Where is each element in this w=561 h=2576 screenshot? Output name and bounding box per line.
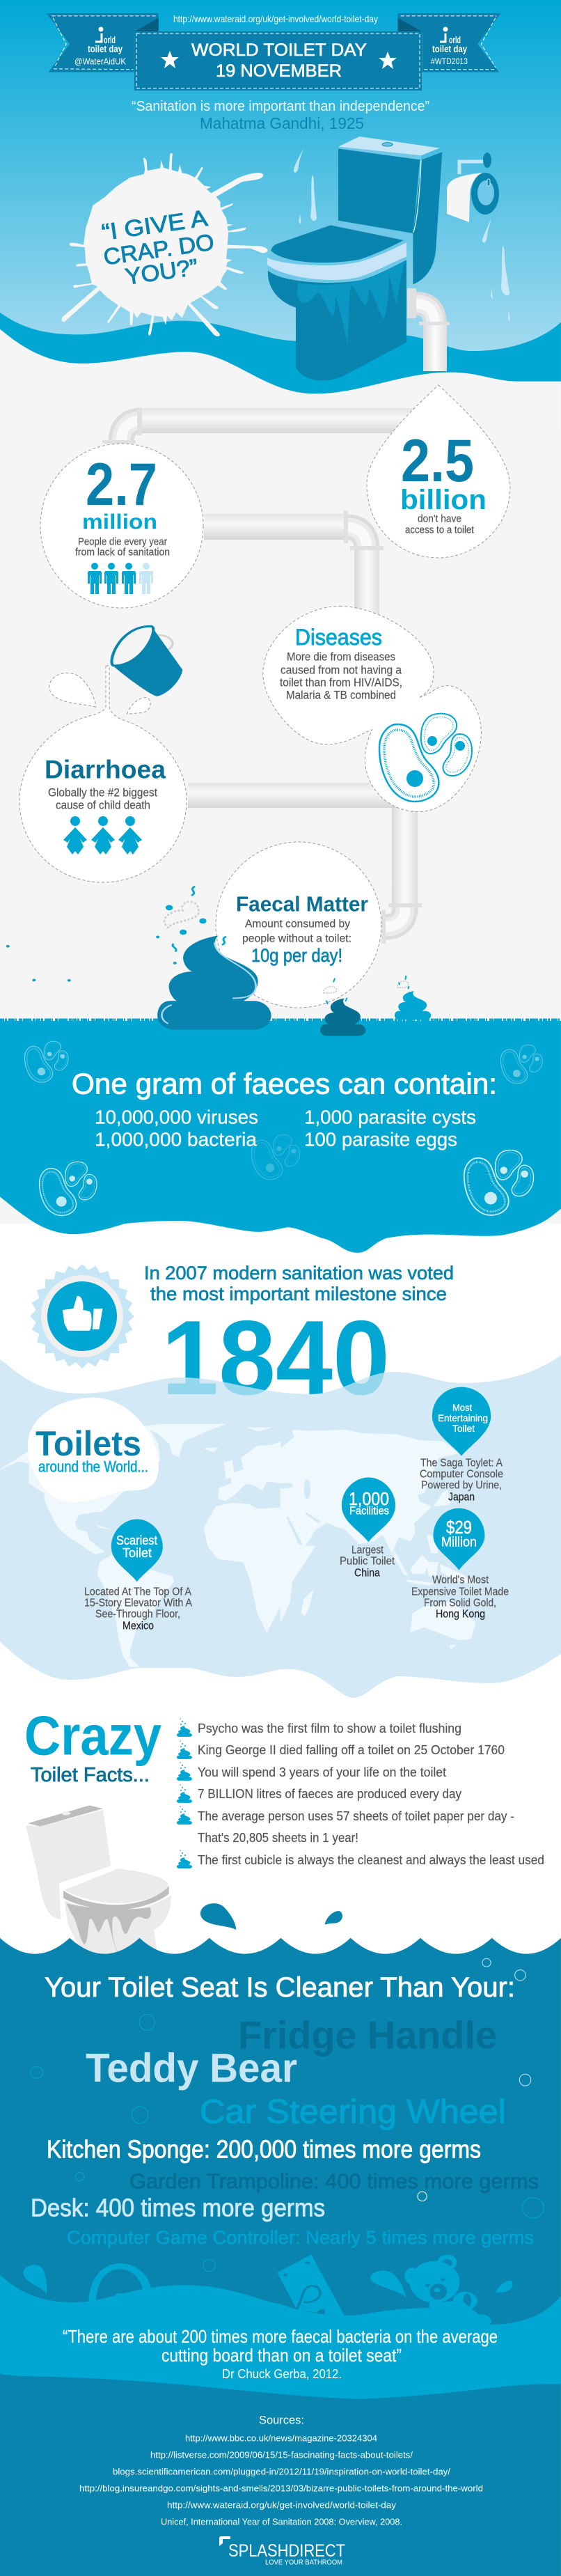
heading: milestone — [144, 1263, 454, 1304]
list: crazy facts: 7 BILLION litres of faeces are produced every day — [198, 1787, 461, 1801]
banner: title: 19 NOVEMBER — [216, 61, 342, 81]
bubble: 2.7 million: 2.7 — [86, 451, 157, 518]
text: saga toylet japan: The Saga Toylet: A — [420, 1457, 503, 1469]
quote attribution: Mahatma Gandhi, 1925 — [200, 114, 364, 132]
sources: blogs.scientificamerican.com/plugged-in/2012/11/19/inspiration-on-world-toilet-day/ — [113, 2467, 450, 2476]
pin: most entertaining toilet: Toilet — [452, 1423, 475, 1434]
banner: right ribbon tail: #WTD2013 — [431, 56, 468, 66]
panel: one gram of faeces: 100 parasite eggs — [304, 1128, 457, 1150]
panel: one gram of faeces: 10,000,000 viruses — [95, 1106, 258, 1128]
heading: toilets around the world: around the World... — [38, 1458, 148, 1475]
banner: left ribbon tail: orld — [104, 34, 116, 45]
bubble: diseases and parasite: Malaria & TB combined — [286, 688, 396, 702]
text: scariest toilet mexico: Mexico — [123, 1620, 154, 1632]
bubble: faecal matter: people without a toilet: — [242, 933, 351, 944]
icon: thumbs up badge — [30, 1264, 134, 1368]
panel: one gram of faeces: 1,000,000 bacteria — [95, 1128, 257, 1150]
list: crazy facts: Psycho was the first film to show a toilet flushing — [198, 1722, 461, 1735]
sources — [79, 2414, 483, 2527]
pin: $29 million — [433, 1508, 484, 1570]
drop large — [200, 1903, 236, 1930]
bubble: diseases and parasite: toilet than from HIV/AIDS, — [280, 676, 402, 689]
text: saga toylet japan: Powered by Urine, — [421, 1479, 502, 1492]
text: most expensive toilet hong kong: Expensive Toilet Made — [411, 1586, 509, 1598]
year 1840: 1840 — [161, 1299, 390, 1417]
panel: dark lower section — [0, 1938, 561, 2576]
banner: left ribbon tail — [47, 13, 159, 72]
item: kitchen sponge: Kitchen Sponge: 200,000 times more germs — [47, 2135, 481, 2163]
pin: scariest toilet: Toilet — [123, 1546, 152, 1560]
logo: splashdirect: SPLASHDIRECT — [228, 2541, 345, 2561]
sources: Unicef, International Year of Sanitation 2008: Overview, 2008. — [161, 2517, 402, 2527]
bubble: diarrhoea — [19, 666, 187, 882]
item: teddy bear: Teddy Bear — [86, 2046, 297, 2091]
splat with slogan — [62, 153, 267, 336]
bubble: 2.5 billion: 2.5 — [401, 428, 474, 494]
banner: title — [134, 31, 422, 91]
pin: $29 million: $29 — [446, 1517, 472, 1538]
panel: one gram of faeces: One gram of faeces can contain: — [72, 1067, 497, 1100]
banner: right ribbon tail: toilet day — [432, 43, 467, 54]
heading: crazy toilet facts: Toilet Facts... — [31, 1764, 150, 1786]
list: crazy facts: The average person uses 57 sheets of toilet paper per day - — [198, 1809, 514, 1823]
text: scariest toilet mexico: 15-Story Elevator With A — [84, 1598, 192, 1609]
bubble: diseases and parasite: caused from not having a — [280, 663, 402, 677]
toilet — [267, 136, 442, 380]
waves under header — [0, 313, 561, 432]
background: sky — [0, 0, 561, 433]
bubble: 2.7 million: million — [82, 510, 157, 533]
list: crazy facts: King George II died falling off a toilet on 25 October 1760 — [198, 1743, 505, 1757]
text: scariest toilet mexico: Located At The Top Of A — [84, 1586, 191, 1598]
bubble: diarrhoea: Globally the #2 biggest — [48, 786, 157, 799]
sources: http://listverse.com/2009/06/15/15-fascinating-facts-about-toilets/ — [150, 2450, 413, 2460]
heading: toilets around the world — [28, 1398, 159, 1502]
panel: quote wave — [0, 2275, 561, 2399]
item: car steering wheel: Car Steering Wheel — [200, 2093, 506, 2131]
panel: one gram of faeces — [0, 1020, 561, 1253]
heading: crazy toilet facts: Crazy — [24, 1705, 161, 1766]
sources: http://www.wateraid.org/uk/get-involved/world-toilet-day — [167, 2500, 397, 2510]
bubble: faecal matter: Faecal Matter — [236, 891, 368, 916]
logo: splashdirect — [219, 2536, 345, 2567]
quote: gerba: “There are about 200 times more faecal bacteria on the average — [63, 2326, 498, 2347]
list: crazy facts — [177, 1718, 544, 1868]
pin: 1,000 facilities — [342, 1477, 395, 1542]
icon: large poo — [6, 887, 271, 1030]
icon: small light poo — [395, 976, 431, 1020]
sources: Sources: — [259, 2414, 304, 2426]
pin: $29 million: Million — [441, 1535, 477, 1550]
pin: most entertaining toilet — [432, 1387, 491, 1456]
text: saga toylet japan — [420, 1457, 503, 1503]
bubble: faecal matter — [216, 842, 381, 1008]
item: game controller: Computer Game Controller: Nearly 5 times more germs — [67, 2227, 534, 2248]
pin: 1,000 facilities: 1,000 — [349, 1488, 389, 1509]
bubble: diseases and parasite — [263, 607, 481, 812]
world map — [0, 1414, 475, 1666]
bubble: diarrhoea: Diarrhoea — [45, 755, 166, 784]
pin: most entertaining toilet: Entertaining — [438, 1412, 488, 1423]
pin: scariest toilet — [111, 1520, 163, 1582]
sources: http://blog.insureandgo.com/sights-and-smells/2013/03/bizarre-public-toilets-from-around-the-world — [79, 2483, 483, 2493]
text: largest public toilet china: Public Toilet — [340, 1556, 395, 1567]
pin: most entertaining toilet: Most — [452, 1402, 472, 1413]
bubble: diseases and parasite: More die from diseases — [287, 650, 395, 663]
text: most expensive toilet hong kong — [411, 1574, 509, 1620]
list: crazy facts: That's 20,805 sheets in 1 year! — [198, 1831, 358, 1845]
list: crazy facts: You will spend 3 years of your life on the toilet — [198, 1765, 446, 1779]
panel: one gram of faeces: 1,000 parasite cysts — [304, 1106, 476, 1128]
bubble: 2.5 billion: billion — [400, 485, 487, 515]
text: largest public toilet china: Largest — [351, 1545, 384, 1556]
banner: right ribbon tail — [398, 13, 501, 72]
bubble: 2.7 million: from lack of sanitation — [75, 546, 170, 559]
bubble: 2.7 million: People die every year — [78, 536, 167, 547]
heading: milestone: In 2007 modern sanitation was voted — [144, 1263, 454, 1283]
water drops — [294, 148, 510, 322]
pipes — [102, 288, 450, 944]
logo: splashdirect: LOVE YOUR BATHROOM — [265, 2559, 342, 2567]
bubble: diseases and parasite: Diseases — [295, 625, 382, 650]
splat with slogan: CRAP. DO — [102, 229, 216, 270]
icon: toilet paper roll — [447, 153, 499, 222]
banner: left ribbon tail: toilet day — [88, 43, 123, 54]
heading: toilets around the world: Toilets — [35, 1424, 141, 1463]
heading: milestone: the most important milestone since — [150, 1283, 447, 1304]
item: garden trampoline: Garden Trampoline: 400 times more germs — [129, 2169, 539, 2194]
splat with slogan: “I GIVE A — [100, 205, 209, 245]
background: grey page — [0, 418, 561, 1224]
text: most expensive toilet hong kong: From Solid Gold, — [424, 1598, 496, 1609]
text: most expensive toilet hong kong: World's Most — [432, 1574, 489, 1586]
bubble: faecal matter: 10g per day! — [251, 945, 342, 966]
text: scariest toilet mexico — [84, 1586, 192, 1632]
pin: scariest toilet: Scariest — [116, 1533, 157, 1547]
bubble: 2.5 billion — [367, 385, 510, 558]
icon: white toilet — [26, 1805, 171, 1954]
icon: small dark poo — [320, 978, 365, 1036]
bubble: faecal matter: Amount consumed by — [245, 918, 350, 930]
illustration: objects floating on wave — [23, 2254, 513, 2328]
bubble: 2.5 billion: don't have — [418, 513, 461, 525]
icon: bucket — [112, 626, 182, 696]
panel: world map background — [0, 1355, 561, 1698]
banner: title: WORLD TOILET DAY — [191, 40, 367, 60]
quote: gerba: cutting board than on a toilet seat” — [161, 2345, 402, 2366]
pin: 1,000 facilities: Facilities — [349, 1506, 389, 1517]
quote: gerba: Dr Chuck Gerba, 2012. — [222, 2367, 342, 2381]
quote: gerba — [63, 2326, 498, 2381]
banner: left ribbon tail: @WaterAidUK — [74, 56, 126, 67]
text: saga toylet japan: Computer Console — [420, 1468, 503, 1481]
text: saga toylet japan: Japan — [448, 1492, 475, 1503]
heading: toilet seat cleaner: Your Toilet Seat Is Cleaner Than Your: — [45, 1972, 515, 2003]
list: crazy facts: The first cubicle is always the cleanest and always the least used — [198, 1853, 544, 1867]
drop small — [325, 1911, 342, 1925]
item: fridge handle: Fridge Handle — [238, 2013, 497, 2057]
text: scariest toilet mexico: See-Through Floor, — [95, 1609, 180, 1620]
text: largest public toilet china — [340, 1545, 395, 1579]
map wave overlay on year — [0, 1355, 561, 1414]
splat with slogan: YOU?” — [123, 253, 200, 290]
bubbles — [31, 1959, 544, 2272]
header url: http://www.wateraid.org/uk/get-involved/world-toilet-day — [173, 13, 378, 24]
banner: right ribbon tail: orld — [449, 34, 461, 45]
bubble: 2.7 million — [40, 444, 203, 608]
quote: “Sanitation is more important than independence” — [132, 99, 429, 114]
text: most expensive toilet hong kong: Hong Kong — [436, 1609, 485, 1620]
text: largest public toilet china: China — [354, 1567, 380, 1579]
item: desk: Desk: 400 times more germs — [31, 2194, 325, 2222]
bubble: diarrhoea: cause of child death — [56, 798, 150, 812]
bubble: 2.5 billion: access to a toilet — [405, 524, 475, 536]
sources: http://www.bbc.co.uk/news/magazine-20324304 — [185, 2433, 377, 2443]
